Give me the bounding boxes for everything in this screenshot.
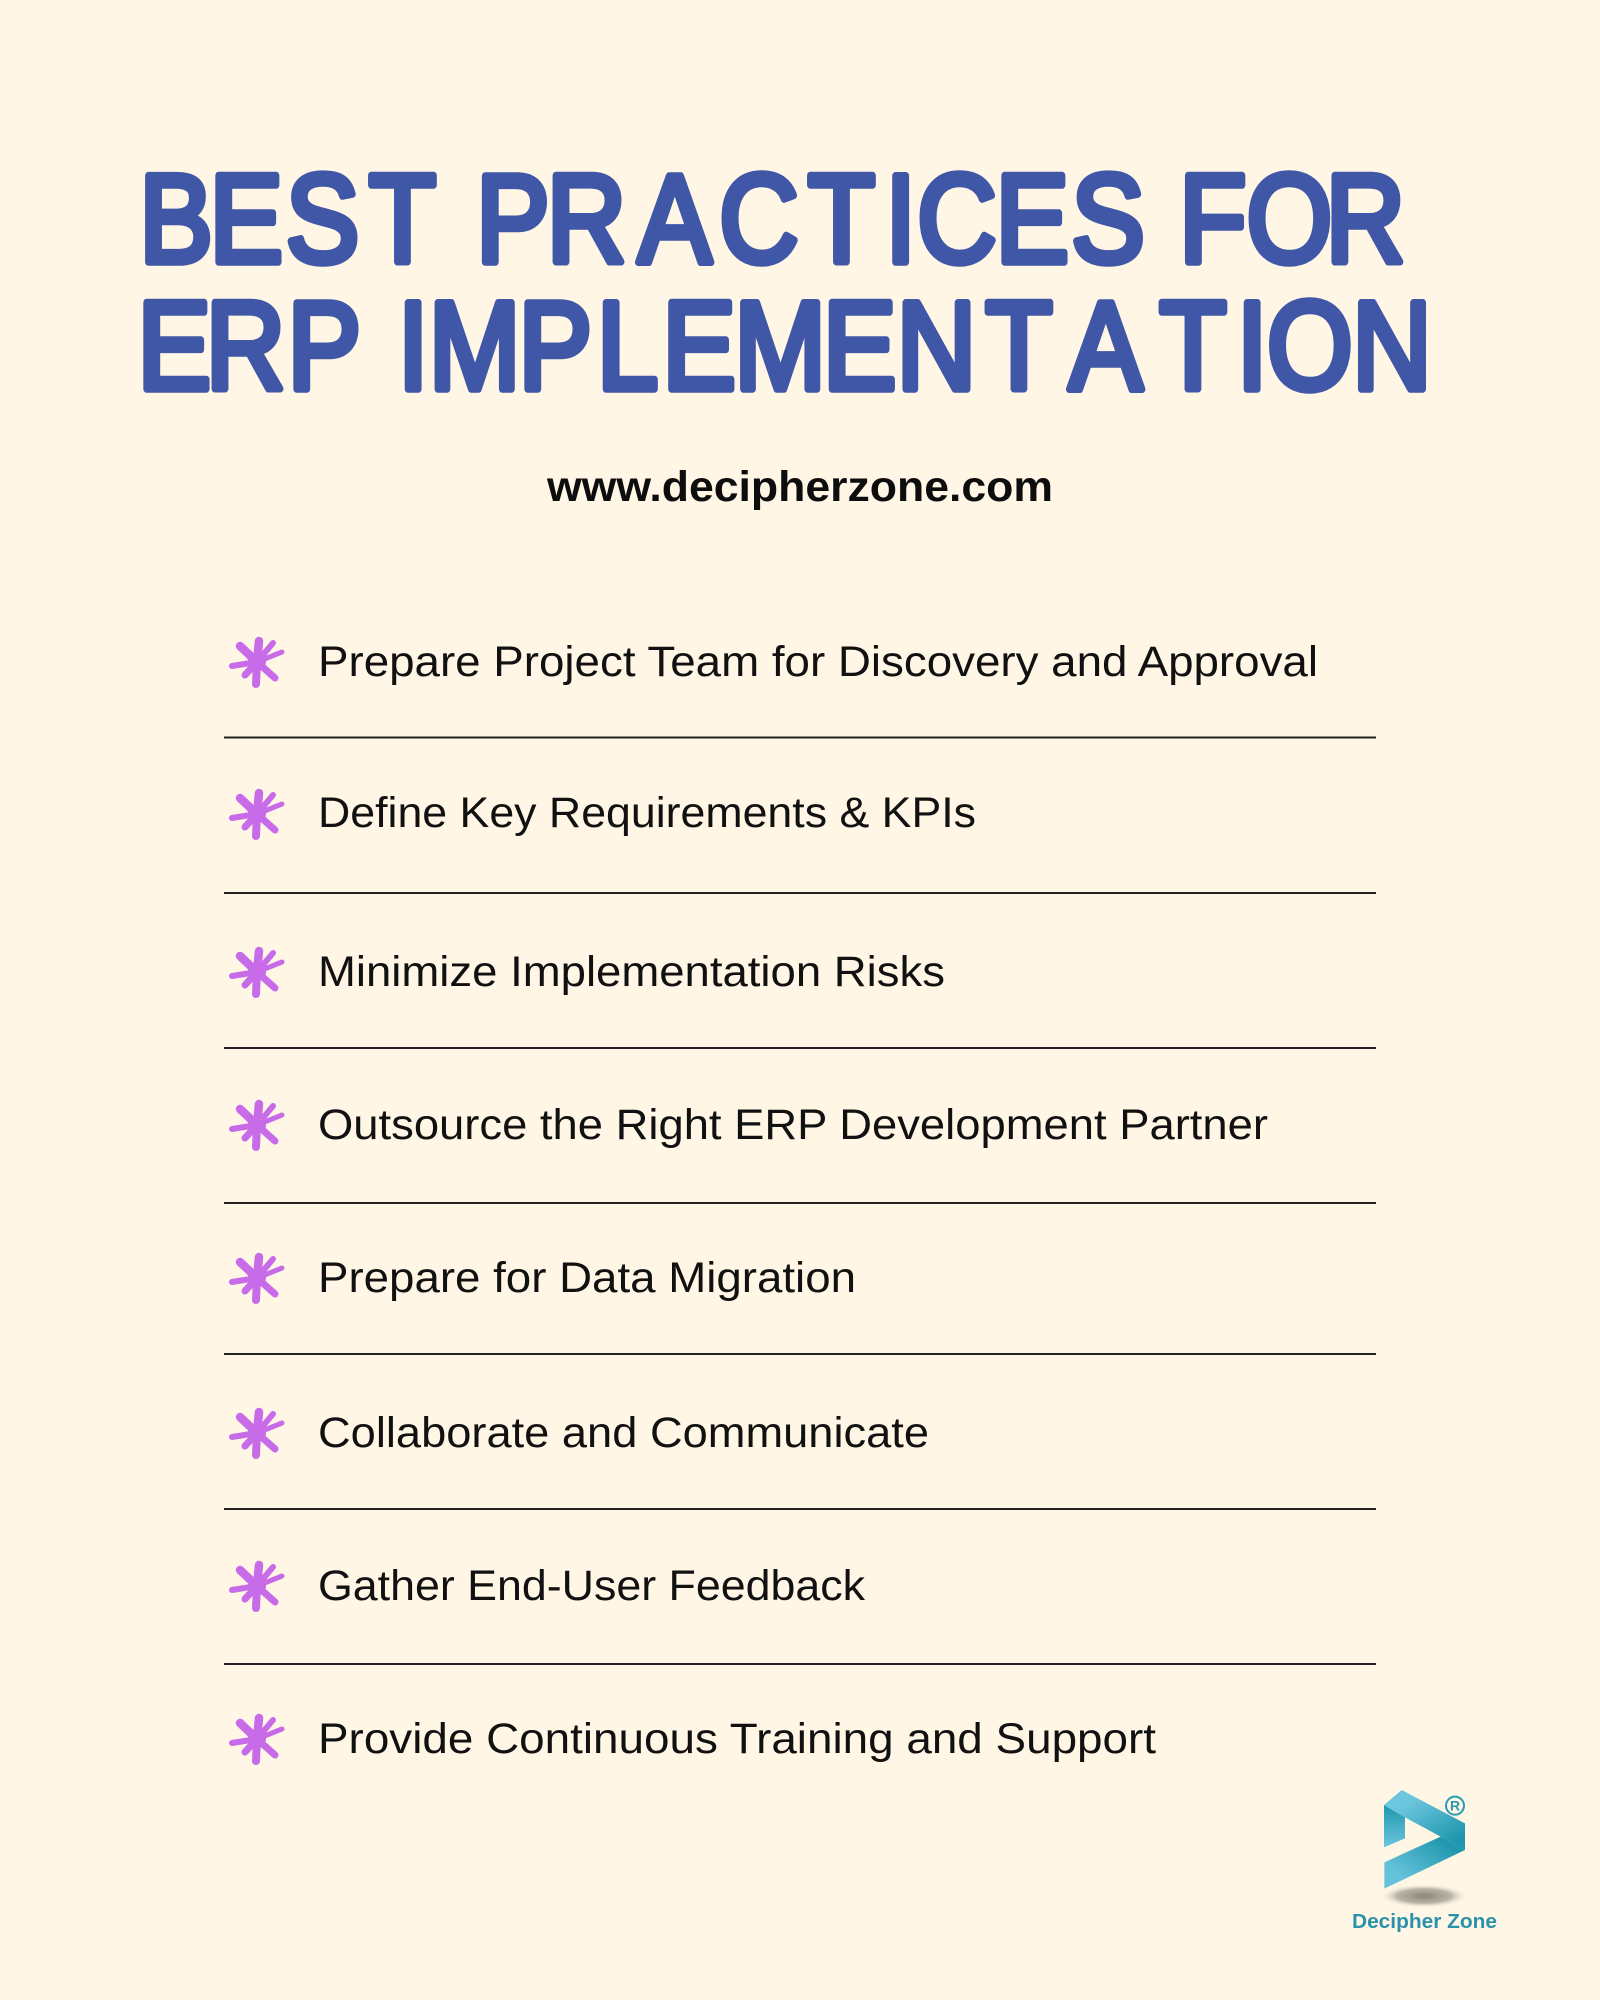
item 2: Define Key Requirements & KPIs (318, 789, 976, 837)
item 1: Prepare Project Team for Discovery and Approval (318, 638, 1318, 686)
item 6: Collaborate and Communicate (318, 1409, 929, 1457)
item 5: Prepare for Data Migration (318, 1254, 856, 1302)
item 7: Gather End-User Feedback (318, 1562, 866, 1610)
title: ERP IMPLEMENTATION (138, 275, 1432, 416)
title (138, 148, 1432, 416)
icon: logo shadow (1379, 1884, 1469, 1908)
title: BEST PRACTICES FOR (139, 148, 1405, 289)
item 4: Outsource the Right ERP Development Partner (318, 1101, 1268, 1149)
item 3: Minimize Implementation Risks (318, 948, 945, 996)
logo: Decipher Zone (1352, 1790, 1497, 1933)
website subtitle: www.decipherzone.com (546, 463, 1053, 511)
icon: play mark (1384, 1790, 1465, 1889)
panel: best practices list (224, 638, 1376, 1763)
icon: registered mark: R (1450, 1798, 1460, 1814)
item 8: Provide Continuous Training and Support (318, 1715, 1156, 1763)
logo wordmark: Decipher Zone (1352, 1911, 1497, 1933)
